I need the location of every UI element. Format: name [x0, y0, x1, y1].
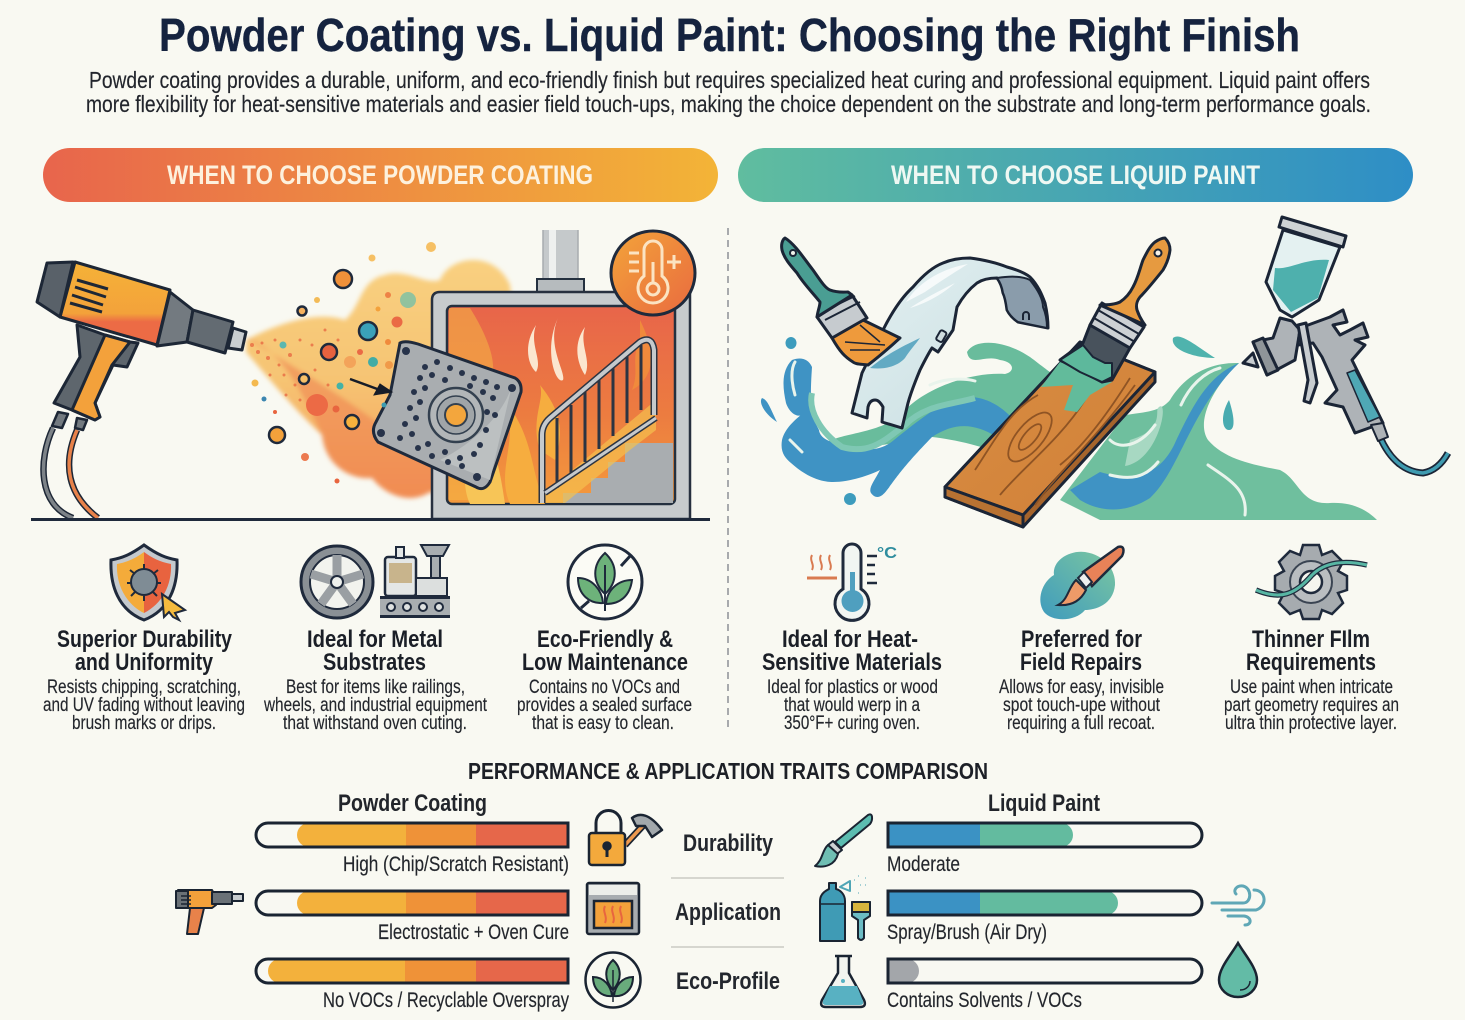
liquid bar: application	[887, 891, 1202, 944]
feature description: ultra thin protective layer.	[1225, 713, 1397, 734]
feature description: and UV fading without leaving	[43, 695, 245, 716]
green wave	[820, 336, 1377, 520]
feature title	[1246, 626, 1376, 676]
car fender part	[852, 258, 1048, 428]
powder bar: application: Electrostatic + Oven Cure	[378, 921, 569, 944]
icon: drop	[1219, 943, 1257, 997]
feature description: that withstand oven cuting.	[283, 713, 467, 734]
powder bar: durability: High (Chip/Scratch Resistant)	[343, 853, 569, 876]
icon: gear with film	[1256, 545, 1367, 619]
icon: thermometer	[807, 544, 897, 620]
heading pill: when to choose powder coating: WHEN TO CHOOSE POWDER COATING	[167, 160, 593, 190]
feature title	[307, 626, 443, 676]
feature description	[43, 677, 245, 734]
feature description: Best for items like railings,	[286, 677, 465, 698]
icon: brush on paint blob	[1040, 547, 1123, 619]
feature: thinner film requirements	[1224, 545, 1399, 734]
feature description	[999, 677, 1164, 734]
oven body	[432, 292, 690, 519]
row label: durability: Durability	[683, 830, 773, 857]
column heading: liquid paint: Liquid Paint	[988, 790, 1100, 817]
powder bar: application	[256, 891, 569, 944]
title: Powder Coating vs. Liquid Paint: Choosing the Right Finish	[159, 9, 1300, 61]
feature: ideal for heat-sensitive materials	[762, 544, 942, 734]
feature title: Ideal for Metal	[307, 626, 443, 653]
heading pill: when to choose powder coating	[43, 148, 718, 202]
icon: oven	[587, 883, 639, 934]
feature description: brush marks or drips.	[72, 713, 216, 734]
feature title: Substrates	[323, 649, 426, 676]
feature title: Superior Durability	[57, 626, 233, 653]
feature: superior durability and uniformity	[43, 545, 245, 734]
feature description: Ideal for plastics or wood	[767, 677, 938, 698]
powder particles	[250, 242, 436, 484]
brush right	[1060, 238, 1170, 382]
oven pipe	[537, 230, 584, 292]
feature description: spot touch-upe without	[1003, 695, 1161, 716]
feature: ideal for metal substrates	[263, 545, 488, 734]
blue splash	[761, 337, 1011, 505]
icon: flask	[821, 956, 865, 1007]
feature description: Allows for easy, invisible	[999, 677, 1164, 698]
icon: paintbrush	[815, 814, 872, 867]
liquid bar: durability: Moderate	[887, 853, 960, 876]
ground line	[31, 518, 710, 521]
feature title	[762, 626, 942, 676]
feature description: provides a sealed surface	[517, 695, 692, 716]
icon: wheel and factory	[301, 545, 450, 618]
icon: eco leaf	[586, 952, 640, 1008]
feature title: Requirements	[1246, 649, 1376, 676]
powder cloud	[246, 260, 515, 498]
liquid bar: eco-profile: Contains Solvents / VOCs	[887, 989, 1082, 1012]
wood plank	[945, 342, 1155, 527]
feature title: Field Repairs	[1020, 649, 1142, 676]
feature description: Contains no VOCs and	[529, 677, 680, 698]
feature title	[1020, 626, 1142, 676]
feature title: Thinner FIlm	[1252, 626, 1370, 653]
feature description: that would werp in a	[784, 695, 920, 716]
feature title: and Uniformity	[75, 649, 214, 676]
powder bar: eco-profile	[256, 959, 569, 1012]
brush left	[782, 238, 900, 365]
stairs and railing	[542, 340, 673, 503]
feature title: Eco-Friendly &	[537, 626, 673, 653]
row label: application: Application	[675, 899, 781, 926]
feature: preferred for field repairs	[999, 547, 1164, 734]
feature title: Low Maintenance	[522, 649, 688, 676]
feature title	[522, 626, 688, 676]
metal plate part	[373, 342, 521, 489]
feature description: wheels, and industrial equipment	[263, 695, 488, 716]
feature description	[1224, 677, 1399, 734]
powder spray gun	[37, 262, 246, 518]
icon: spray can and brush	[820, 876, 870, 941]
liquid bar: durability	[887, 823, 1202, 876]
feature description	[263, 677, 488, 734]
feature description: part geometry requires an	[1224, 695, 1399, 716]
temperature badge	[611, 231, 695, 315]
icon: thermometer: °C	[877, 545, 897, 562]
feature title	[57, 626, 233, 676]
feature title: Preferred for	[1021, 626, 1142, 653]
liquid bar: eco-profile	[887, 959, 1202, 1012]
illustration: liquid paint tools and splash	[761, 217, 1448, 527]
spray gun with paint cup	[1243, 217, 1448, 473]
icon: shield	[111, 545, 185, 620]
feature title: Ideal for Heat-	[782, 626, 918, 653]
row label: eco-profile: Eco-Profile	[676, 968, 780, 995]
feature: eco-friendly and low maintenance	[517, 545, 692, 734]
feature description: that is easy to clean.	[532, 713, 674, 734]
feature description: Resists chipping, scratching,	[47, 677, 241, 698]
feature description	[767, 677, 938, 734]
heading pill: when to choose liquid paint: WHEN TO CHOOSE LIQUID PAINT	[891, 160, 1260, 190]
icon: lock and hammer	[589, 810, 662, 865]
powder bar: durability	[256, 823, 569, 876]
arrow to plate	[350, 379, 392, 395]
liquid bar: application: Spray/Brush (Air Dry)	[887, 921, 1047, 944]
feature title: Sensitive Materials	[762, 649, 942, 676]
feature description: Use paint when intricate	[1230, 677, 1393, 698]
illustration: powder coating spray and oven	[31, 230, 710, 521]
feature description: 350°F+ curing oven.	[784, 713, 920, 734]
icon: small spray gun	[176, 890, 243, 934]
column heading: powder coating: Powder Coating	[338, 790, 487, 817]
feature description	[517, 677, 692, 734]
comparison heading: PERFORMANCE & APPLICATION TRAITS COMPARISON	[468, 758, 988, 784]
icon: wind	[1212, 886, 1264, 925]
feature description: requiring a full recoat.	[1007, 713, 1155, 734]
intro text	[86, 67, 1371, 117]
heading pill: when to choose liquid paint	[738, 148, 1413, 202]
powder bar: eco-profile: No VOCs / Recyclable Overspray	[323, 989, 569, 1012]
icon: leaf no VOC	[568, 545, 642, 619]
